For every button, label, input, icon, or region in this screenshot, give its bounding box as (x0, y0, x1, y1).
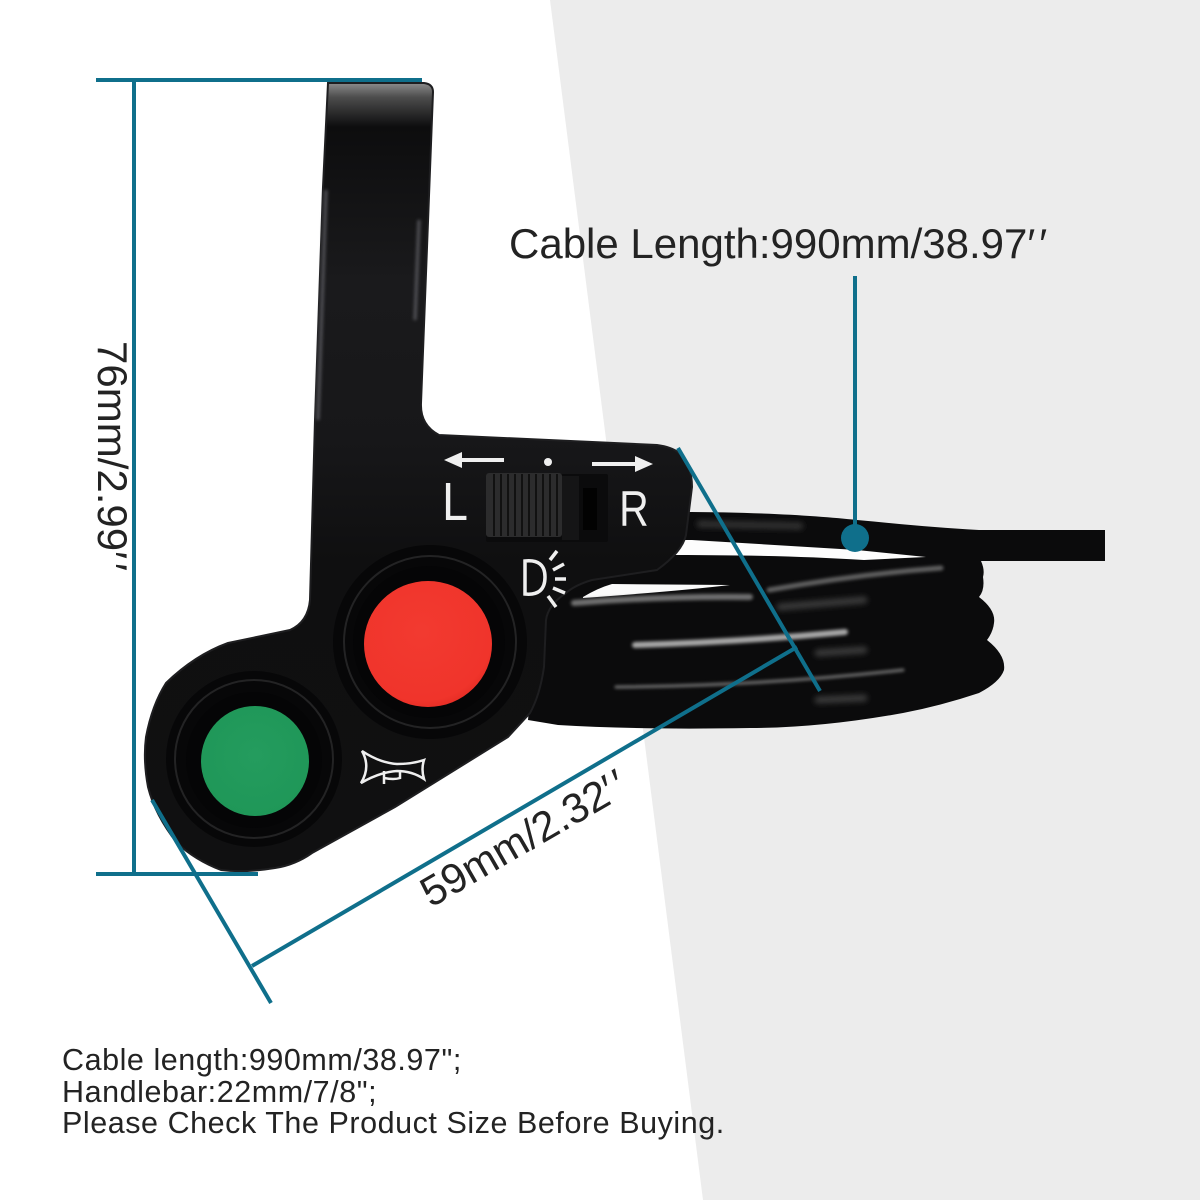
icon: headlight symbol (525, 551, 566, 607)
text: switch markings: L (442, 471, 468, 532)
text: switch markings: R (619, 481, 649, 537)
text block: product notes: Please Check The Product Size Before Buying. (62, 1106, 725, 1140)
callout: cable length: Cable Length:990mm/38.97′′ (509, 220, 1051, 267)
icon: red button (333, 545, 527, 739)
icon: coiled cable (528, 512, 1105, 729)
icon: direction arrows (444, 452, 653, 472)
dimension: width 59mm: 59mm/2.32′′ (412, 758, 638, 916)
icon: handlebar switch body (145, 83, 692, 871)
icon: green button (166, 671, 342, 847)
callout: cable length (509, 220, 1051, 552)
icon: slide switch (486, 473, 608, 542)
text block: product notes: Cable length:990mm/38.97"; (62, 1043, 462, 1077)
text block: product notes (62, 1043, 725, 1140)
clamp edge highlights (318, 190, 419, 420)
icon: horn symbol (361, 751, 424, 784)
dimension: width 59mm (152, 448, 820, 1003)
text: switch markings (442, 471, 649, 537)
dimension: height 76mm: 76mm/2.99 ′′ (89, 341, 136, 575)
text block: product notes: Handlebar:22mm/7/8"; (62, 1075, 377, 1109)
